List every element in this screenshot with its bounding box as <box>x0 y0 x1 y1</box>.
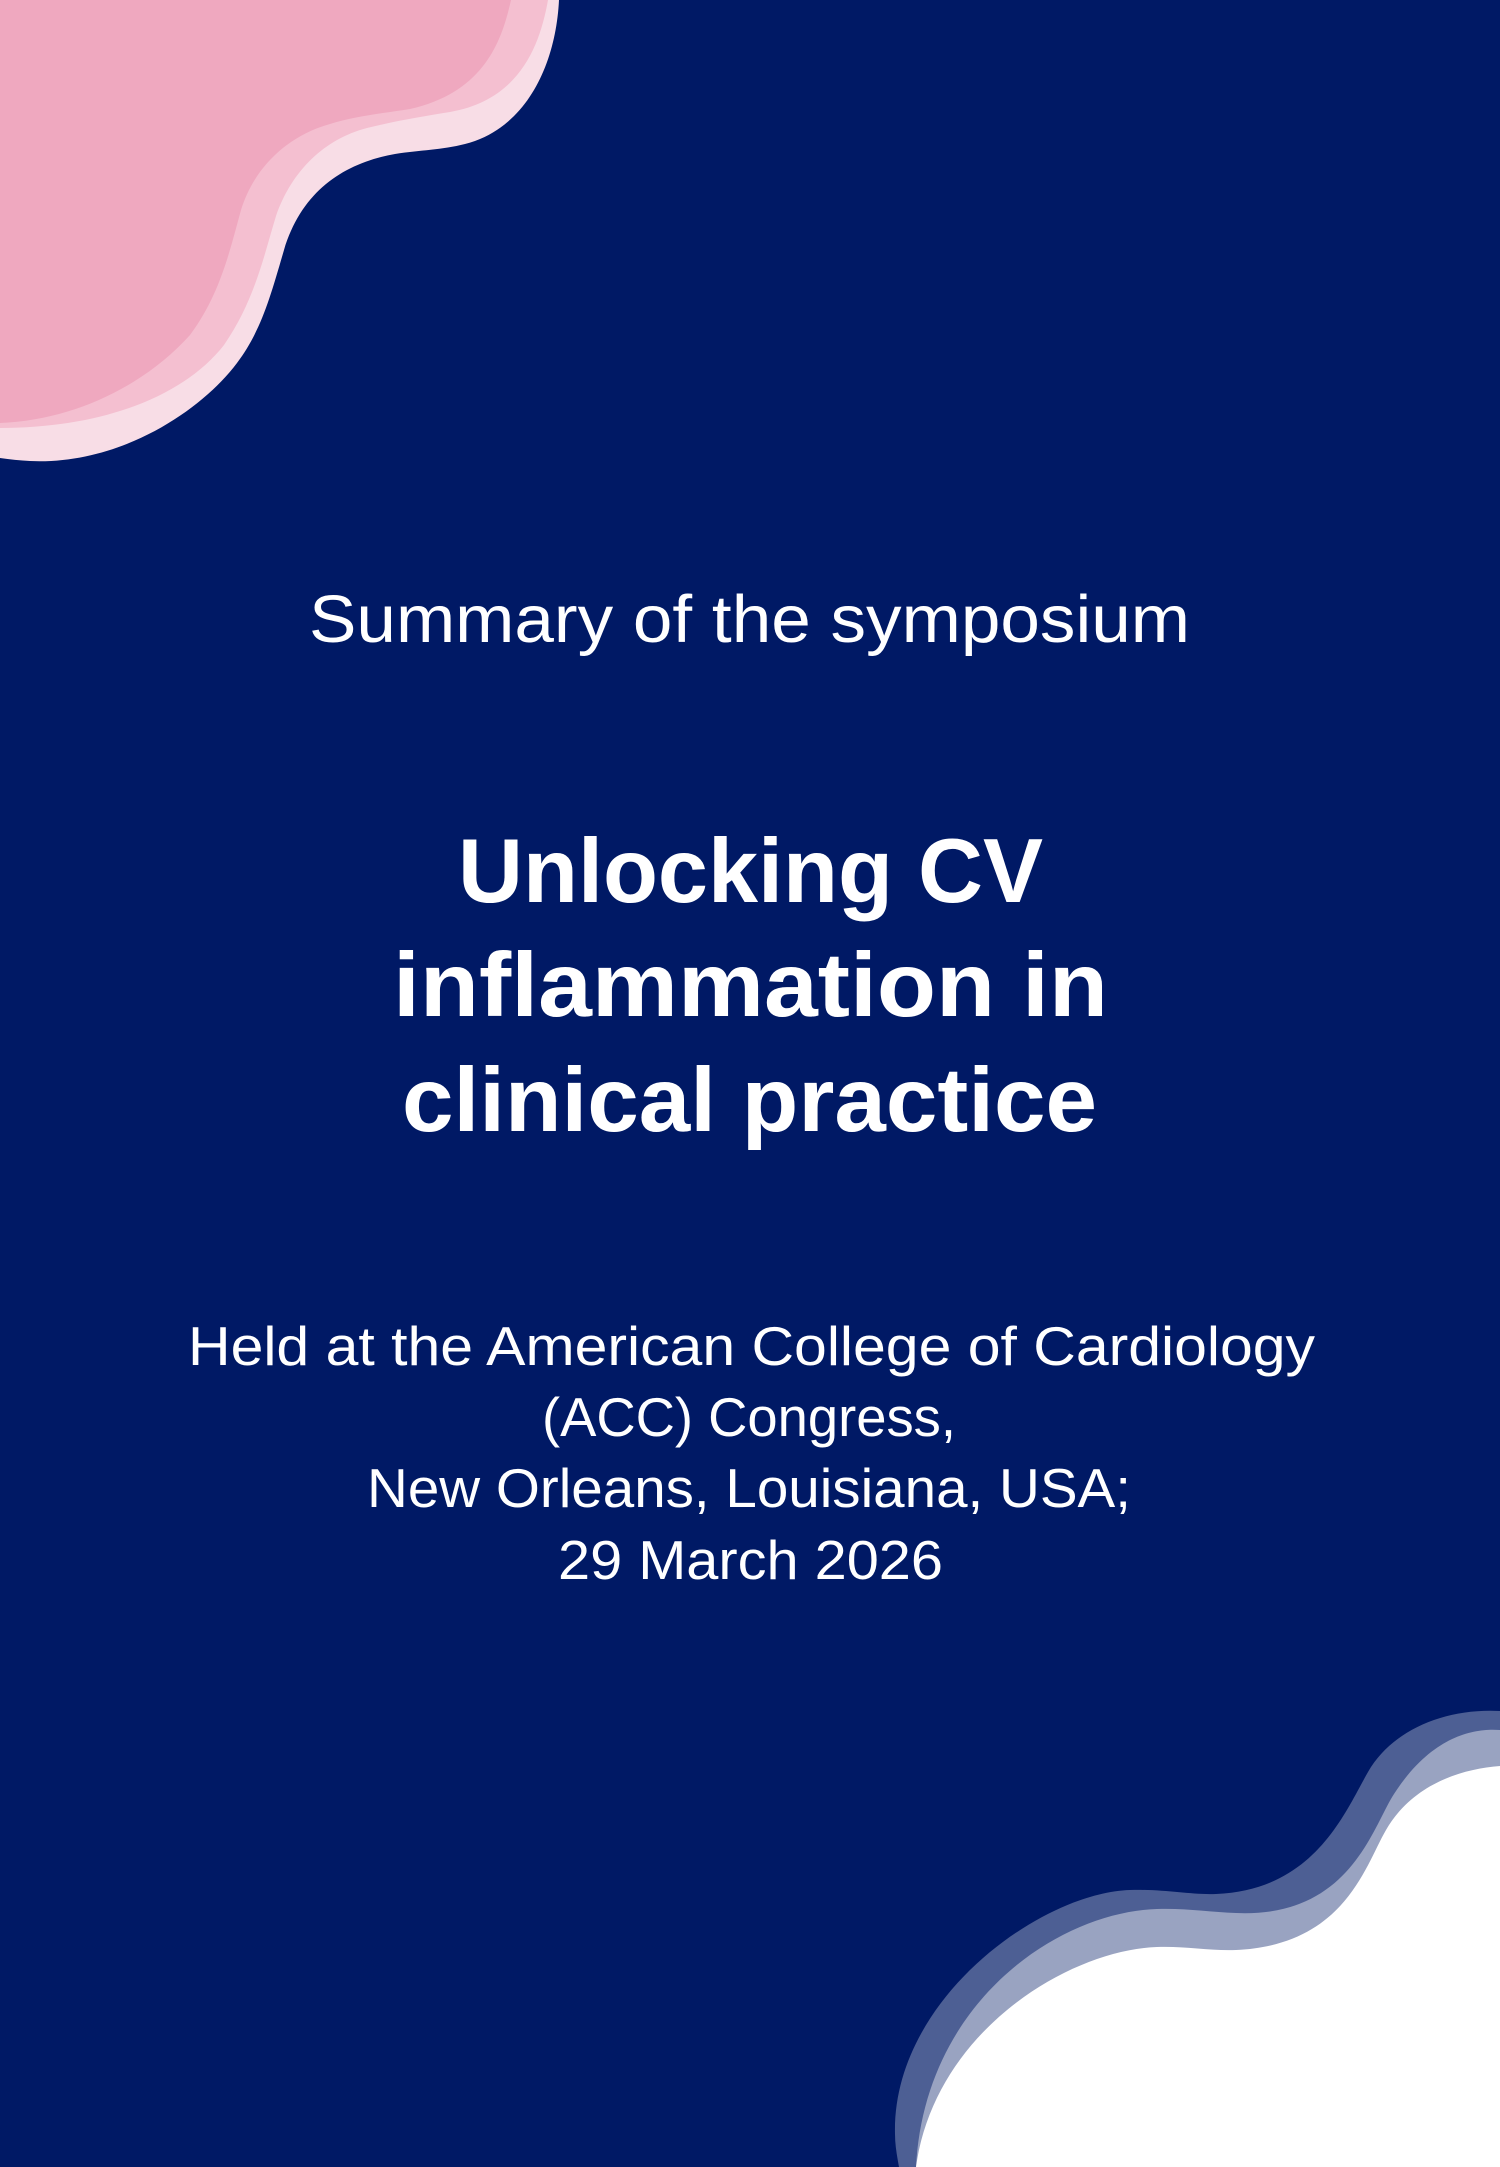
event details: venue and date: New Orleans, Louisiana, USA; <box>367 1457 1131 1519</box>
title: unlocking CV inflammation in clinical practice <box>393 821 1108 1151</box>
subtitle: summary of the symposium: Summary of the symposium <box>309 582 1190 657</box>
event details: venue and date: 29 March 2026 <box>558 1529 943 1591</box>
title: unlocking CV inflammation in clinical practice: clinical practice <box>402 1050 1097 1151</box>
event details: venue and date: (ACC) Congress, <box>542 1386 956 1448</box>
decorative white wave: bottom-right corner <box>895 1711 1500 2167</box>
event details: venue and date <box>188 1315 1316 1591</box>
event details: venue and date: Held at the American College of Cardiology <box>188 1315 1316 1377</box>
title: unlocking CV inflammation in clinical practice: inflammation in <box>393 935 1108 1036</box>
decorative pink wave: top-left corner <box>0 0 559 461</box>
title: unlocking CV inflammation in clinical practice: Unlocking CV <box>458 821 1043 922</box>
